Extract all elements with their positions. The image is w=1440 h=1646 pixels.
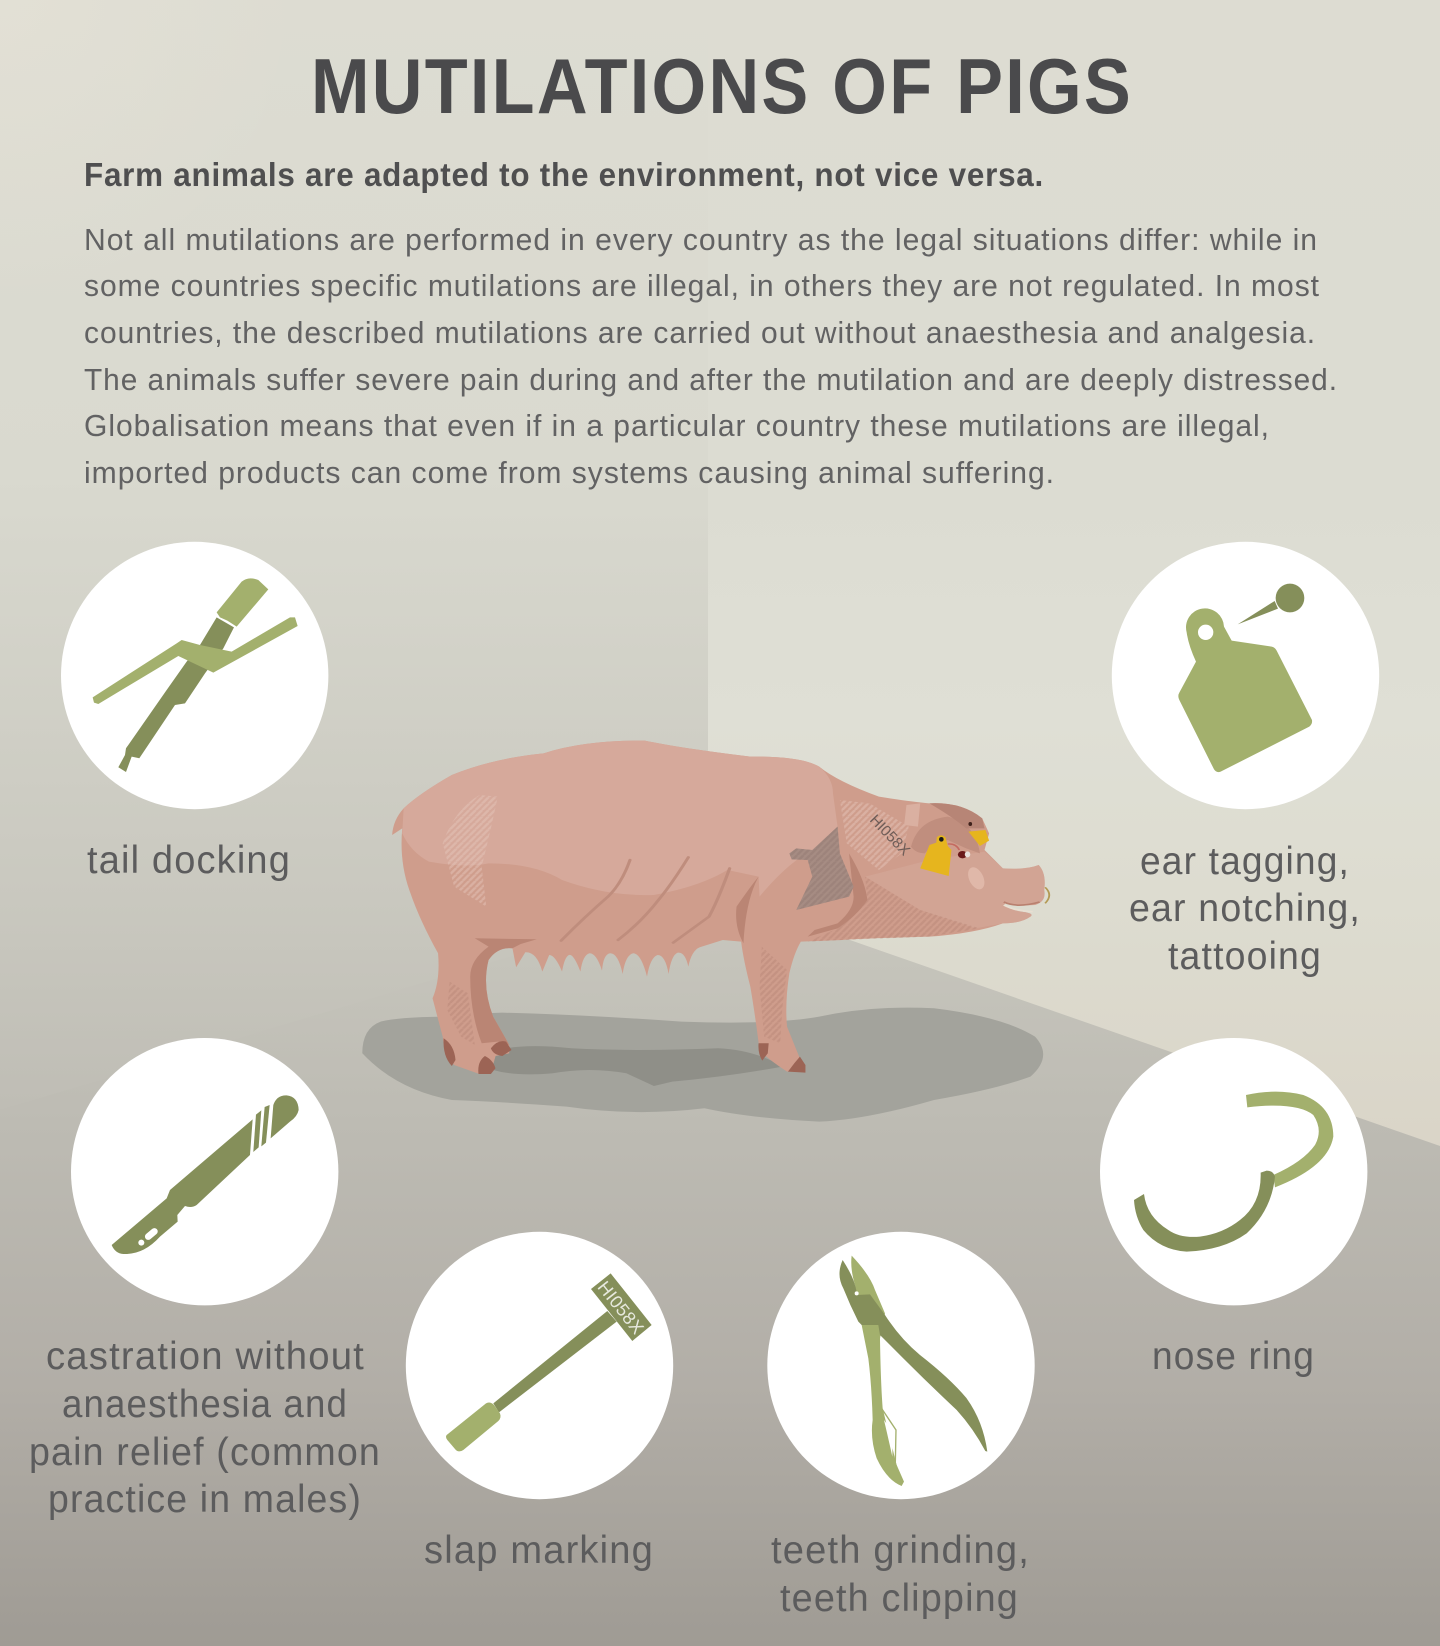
title: MUTILATIONS OF PIGS: [311, 42, 1133, 130]
circle: castration: [71, 1038, 338, 1305]
label: ear tagging: ear tagging,: [1140, 840, 1350, 883]
label: slap marking: slap marking: [424, 1529, 654, 1572]
icon: ear tag and pin: [1178, 584, 1312, 772]
label: teeth grinding: [771, 1529, 1030, 1620]
pig grey skin patch: [789, 827, 854, 910]
pig hatching: [443, 795, 980, 1045]
intro paragraph: The animals suffer severe pain during and after the mutilation and are deeply distressed.: [84, 362, 1338, 397]
pig mouth: [1004, 902, 1040, 912]
label: castration: anaesthesia and: [62, 1383, 348, 1426]
pig head highlight: [865, 852, 1045, 928]
icon: nose ring: [1134, 1092, 1333, 1252]
pig cheek highlight: [965, 866, 987, 891]
icon: teeth clippers: [839, 1256, 987, 1486]
circle: ear tagging: [1112, 542, 1379, 809]
label: teeth grinding: teeth grinding,: [771, 1529, 1030, 1572]
label: castration: castration without: [46, 1335, 365, 1378]
pig hooves: [443, 1038, 805, 1074]
label: ear tagging: tattooing: [1168, 935, 1322, 978]
intro paragraph: imported products can come from systems causing animal suffering.: [84, 455, 1055, 490]
intro paragraph: countries, the described mutilations are carried out without anaesthesia and analgesia.: [84, 315, 1316, 350]
label: ear tagging: ear notching,: [1129, 887, 1361, 930]
circle: slap marking: [406, 1232, 673, 1499]
pig ears: [904, 803, 985, 853]
nose ring on pig: [1045, 887, 1049, 903]
circle: tail docking: [61, 542, 328, 809]
intro paragraph: Globalisation means that even if in a particular country these mutilations are illegal,: [84, 408, 1270, 443]
pig eye: [948, 844, 970, 858]
subheading: Farm animals are adapted to the environment, not vice versa.: [84, 156, 1044, 193]
pig shadow: [362, 1008, 1043, 1122]
pig tattoo number: HI058X: [866, 811, 913, 859]
pig body: [392, 741, 1045, 1074]
circle: teeth grinding: [767, 1232, 1035, 1499]
icon: slap marker: [446, 1273, 652, 1451]
label: teeth grinding: teeth clipping: [780, 1577, 1019, 1620]
pig illustration: [362, 741, 1049, 1122]
icon: scalpel: [112, 1095, 299, 1254]
intro paragraph: some countries specific mutilations are illegal, in others they are not regulated. In most: [84, 268, 1320, 303]
pig upper back highlight: [402, 741, 838, 897]
intro paragraph: Not all mutilations are performed in every country as the legal situations differ: while in: [84, 222, 1318, 257]
intro paragraph: [84, 222, 1338, 490]
pig leg creases: [470, 853, 867, 1045]
pig skin folds: [561, 857, 730, 943]
label: castration: practice in males): [48, 1478, 362, 1521]
circle: nose ring: [1100, 1038, 1367, 1305]
yellow ear tags: [920, 830, 989, 876]
icon: slap marker: HI058X: [594, 1277, 648, 1338]
label: ear tagging: [1129, 840, 1361, 978]
label: tail docking: tail docking: [87, 839, 291, 882]
icon: tail docking pliers: [93, 578, 298, 772]
label: castration: [29, 1335, 381, 1521]
label: castration: pain relief (common: [29, 1431, 381, 1474]
label: nose ring: nose ring: [1152, 1335, 1315, 1378]
